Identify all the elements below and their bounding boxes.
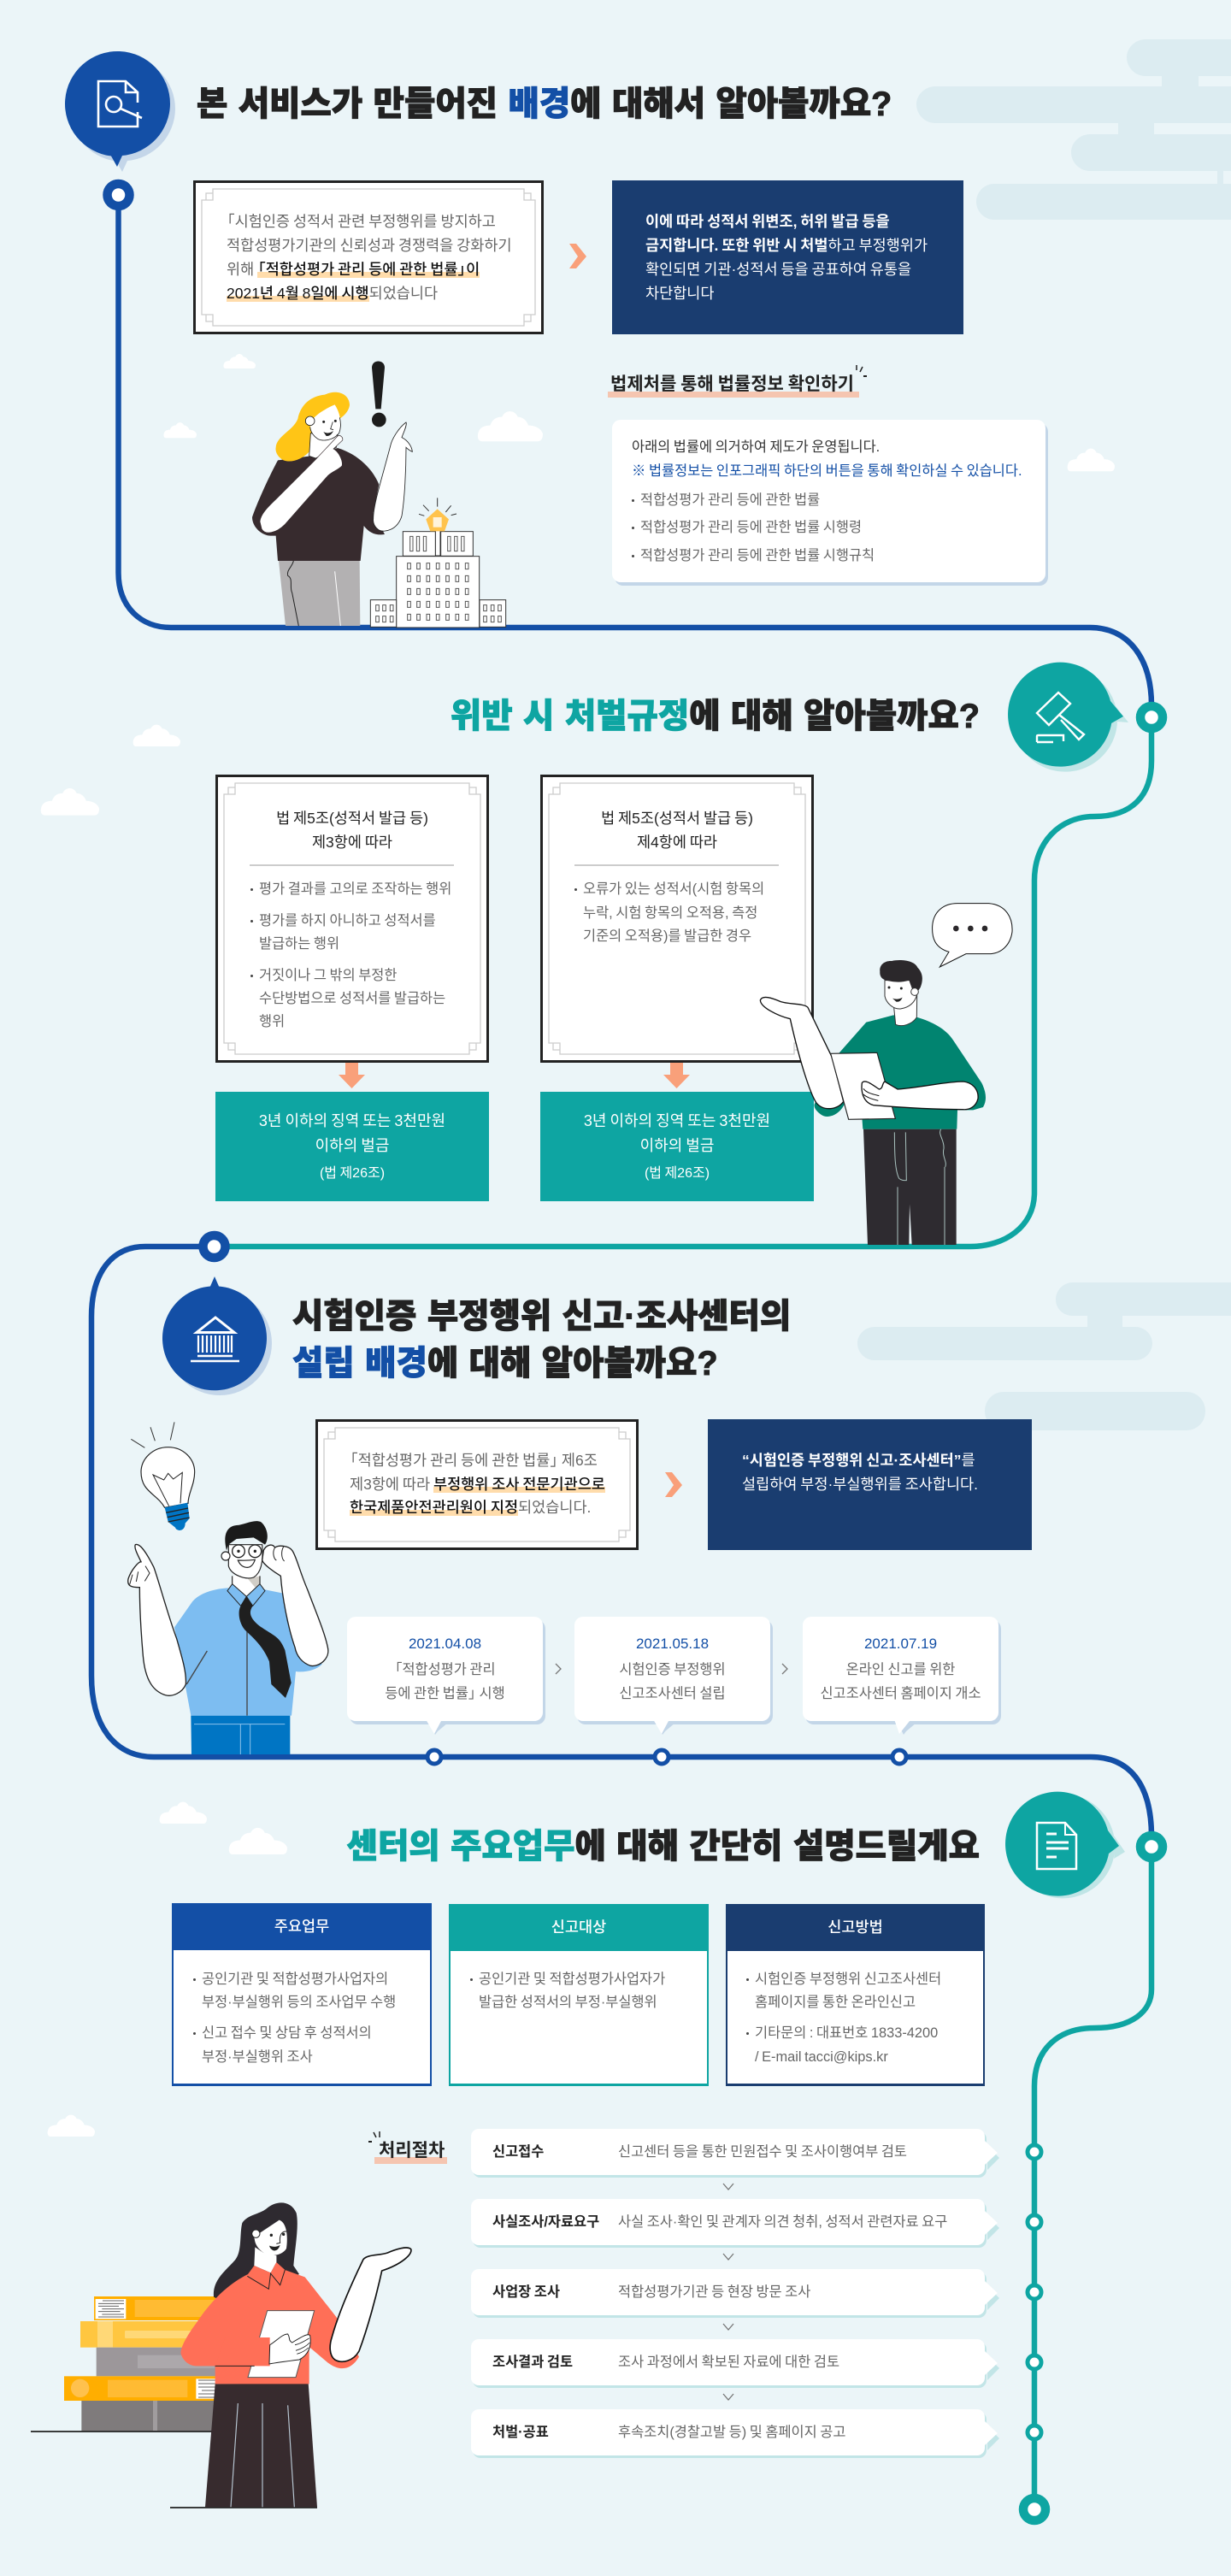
list: report targets: 발급한 성적서의 부정·부실행위 [479, 1995, 657, 2010]
text: law background: 적합성평가기관의 신뢰성과 경쟁력을 강화하기 [227, 237, 512, 254]
text: article title: 제4항에 따라 [637, 834, 717, 851]
text: description [385, 1662, 505, 1701]
list: violations: 행위 [259, 1014, 285, 1029]
text: center purpose: 설립하여 부정·부실행위를 조사합니다. [742, 1476, 978, 1493]
text: designation note: 「적합성평가 관리 등에 관한 법률」 제6조 [343, 1452, 598, 1469]
sub heading: process [368, 2131, 447, 2164]
list: main duties: 공인기관 및 적합성평가사업자의 [202, 1972, 388, 1987]
panel: process step 2 [471, 2199, 985, 2245]
panel: process step 1: 신고접수 [492, 2144, 544, 2160]
header: main duties [172, 1903, 432, 1950]
list: violations [250, 881, 451, 1029]
illustration: woman with tablet and books [31, 2202, 412, 2508]
text: prohibition note: 금지합니다. 또한 위반 시 처벌하고 부정행위가 [645, 237, 928, 254]
panel: report methods [726, 1904, 985, 2086]
text: prohibition note: 이에 따라 성적서 위변조, 허위 발급 등을 [645, 213, 890, 230]
heading: section 3: 시험인증 부정행위 신고·조사센터의 [292, 1298, 791, 1335]
text: date: 2021.04.08 [409, 1636, 481, 1652]
text: law background [220, 213, 512, 302]
panel: article 5 paragraph 4 [540, 775, 814, 1063]
panel: penalty 1: 3년 이하의 징역 또는 3천만원 [259, 1112, 445, 1129]
text: designation note: 한국제품안전관리원이 지정되었습니다. [350, 1499, 591, 1516]
arrow: step [781, 1664, 788, 1674]
text: description: 신고조사센터 설립 [619, 1686, 726, 1701]
text: article title [276, 810, 428, 851]
text: prohibition note [645, 213, 928, 302]
list: report methods [746, 1972, 941, 2065]
text: law background: 「시험인증 성적서 관련 부정행위를 방지하고 [220, 213, 496, 230]
list: report targets: 공인기관 및 적합성평가사업자가 [479, 1972, 665, 1987]
illustration: woman pointing and building [252, 361, 506, 628]
text: article title: 법 제5조(성적서 발급 등) [276, 810, 428, 827]
list: violations: 발급하는 행위 [259, 936, 339, 952]
icon: institution bubble [162, 1276, 272, 1395]
text: prohibition note: 확인되면 기관·성적서 등을 공표하여 유통을 [645, 261, 911, 278]
list: violations: 평가를 하지 아니하고 성적서를 [259, 913, 436, 928]
panel: penalty 2: (법 제26조) [645, 1166, 710, 1181]
sub heading: law info [608, 365, 867, 398]
text: article title: 제3항에 따라 [312, 834, 392, 851]
arrow: step [556, 1664, 562, 1674]
sub heading: law info: 법제처를 통해 법률정보 확인하기 [610, 374, 854, 394]
illustration: man with glasses and light bulb [127, 1422, 328, 1754]
list: report methods: / E-mail tacci@kips.kr [755, 2049, 888, 2065]
text: center purpose [742, 1452, 978, 1493]
list: main duties: 신고 접수 및 상담 후 성적서의 [202, 2025, 372, 2041]
list: violations [574, 881, 764, 944]
panel: timeline card 2021.05.18 [574, 1617, 773, 1735]
list: main duties [193, 1972, 396, 2065]
list: laws: 적합성평가 관리 등에 관한 법률 시행규칙 [640, 548, 875, 563]
text: prohibition note: 차단합니다 [645, 285, 715, 302]
arrow: down to penalty 1 [339, 1063, 365, 1088]
panel: process step 1: 신고센터 등을 통한 민원접수 및 조사이행여부 검토 [618, 2144, 907, 2160]
icon: document bubble [1005, 1792, 1125, 1898]
arrow: chevron [665, 1472, 682, 1497]
list: laws: 적합성평가 관리 등에 관한 법률 [640, 492, 820, 508]
list: violations: 누락, 시험 항목의 오적용, 측정 [583, 905, 757, 921]
list: violations: 평가 결과를 고의로 조작하는 행위 [259, 881, 451, 897]
text: description: 온라인 신고를 위한 [846, 1662, 955, 1677]
list: report methods: 기타문의 : 대표번호 1833-4200 [755, 2025, 938, 2041]
header: main duties: 주요업무 [274, 1918, 329, 1935]
list: main duties: 부정·부실행위 조사 [202, 2049, 313, 2065]
list: report methods: 시험인증 부정행위 신고조사센터 [755, 1972, 941, 1987]
panel: article 5 paragraph 3 [215, 775, 489, 1063]
list: main duties: 부정·부실행위 등의 조사업무 수행 [202, 1995, 396, 2010]
text: description: 시험인증 부정행위 [619, 1662, 726, 1677]
header: report targets: 신고대상 [551, 1919, 606, 1936]
panel: penalty 2: 3년 이하의 징역 또는 3천만원 [584, 1112, 770, 1129]
heading: section 4: 센터의 주요업무에 대해 간단히 설명드릴게요 [347, 1828, 980, 1866]
text: description: 신고조사센터 홈페이지 개소 [820, 1686, 981, 1701]
icon: document search bubble [65, 51, 175, 172]
panel: report targets [449, 1904, 709, 2086]
panel: process step 5 [471, 2409, 985, 2455]
panel: process step 3: 사업장 조사 [492, 2284, 560, 2300]
text: designation note [343, 1452, 605, 1516]
panel: center purpose [708, 1419, 1032, 1550]
panel: penalty 1 [215, 1092, 489, 1201]
list: laws: 적합성평가 관리 등에 관한 법률 시행령 [640, 520, 862, 535]
panel: penalty 1: (법 제26조) [320, 1166, 385, 1181]
list: laws [632, 492, 875, 563]
list: violations: 수단방법으로 성적서를 발급하는 [259, 991, 445, 1006]
header: report methods [726, 1904, 985, 1951]
panel: process step 4: 조사결과 검토 [492, 2355, 573, 2370]
panel: process step 2: 사실조사/자료요구 [492, 2214, 599, 2230]
heading: section 1: 본 서비스가 만들어진 배경에 대해서 알아볼까요? [197, 85, 892, 123]
panel: process step 3: 적합성평가기관 등 현장 방문 조사 [618, 2284, 810, 2300]
text: date: 2021.05.18 [636, 1636, 709, 1652]
heading: section 3: 설립 배경에 대해 알아볼까요? [292, 1345, 718, 1382]
panel: process step 5: 후속조치(경찰고발 등) 및 홈페이지 공고 [618, 2425, 845, 2440]
panel: process step 2: 사실 조사·확인 및 관계자 의견 청취, 성적서 관련자료 요구 [618, 2214, 947, 2230]
icon: gavel bubble [1008, 662, 1128, 772]
panel: process step 3 [471, 2269, 985, 2315]
list: violations: 오류가 있는 성적서(시험 항목의 [583, 881, 764, 897]
text: article title [601, 810, 753, 851]
panel: prohibition note [612, 180, 963, 334]
text: description [619, 1662, 726, 1701]
header: report targets [449, 1904, 709, 1951]
text: center purpose: “시험인증 부정행위 신고·조사센터”를 [742, 1452, 975, 1469]
arrows: process chevrons [723, 2184, 733, 2401]
text: description [820, 1662, 981, 1701]
panel: penalty 2: 이하의 벌금 [640, 1137, 714, 1154]
arrow: down to penalty 2 [663, 1063, 690, 1088]
panel: timeline card 2021.07.19 [803, 1617, 1001, 1735]
text: description: 등에 관한 법률」 시행 [385, 1686, 505, 1701]
sub heading: process: 처리절차 [379, 2141, 445, 2160]
header: report methods: 신고방법 [828, 1919, 883, 1936]
text: designation note: 제3항에 따라 부정행위 조사 전문기관으로 [350, 1476, 605, 1493]
text: article title: 법 제5조(성적서 발급 등) [601, 810, 753, 827]
text: date: 2021.07.19 [864, 1636, 937, 1652]
panel: law background [193, 180, 544, 334]
text: notice: ※ 법률정보는 인포그래픽 하단의 버튼을 통해 확인하실 수 있습니다. [632, 463, 1022, 479]
panel: law list card [612, 420, 1045, 582]
panel: penalty 1: 이하의 벌금 [315, 1137, 389, 1154]
list: violations: 기준의 오적용)를 발급한 경우 [583, 928, 751, 944]
panel: main duties [172, 1903, 432, 2086]
arrow: chevron [569, 244, 586, 268]
panel: process step 5: 처벌·공표 [492, 2425, 549, 2440]
illustration: man with tablet and speech bubble [759, 903, 1013, 1245]
panel: process step 1 [471, 2129, 985, 2175]
panel: process step 4: 조사 과정에서 확보된 자료에 대한 검토 [618, 2355, 839, 2370]
panel: designation note [315, 1419, 639, 1550]
heading: section 3 [292, 1298, 791, 1382]
heading: section 2: 위반 시 처벌규정에 대해 알아볼까요? [451, 698, 980, 735]
text: law background: 2021년 4월 8일에 시행되었습니다 [227, 285, 438, 302]
list: report methods: 홈페이지를 통한 온라인신고 [755, 1995, 916, 2010]
list: report targets [470, 1972, 665, 2010]
panel: process step 4 [471, 2339, 985, 2385]
panel: penalty 2 [540, 1092, 814, 1201]
text: description: 「적합성평가 관리 [388, 1662, 496, 1677]
panel: timeline card 2021.04.08 [347, 1617, 545, 1735]
text: intro: 아래의 법률에 의거하여 제도가 운영됩니다. [632, 439, 880, 455]
list: violations: 거짓이나 그 밖의 부정한 [259, 968, 397, 983]
text: law background: 위해 「적합성평가 관리 등에 관한 법률」이 [227, 261, 480, 278]
